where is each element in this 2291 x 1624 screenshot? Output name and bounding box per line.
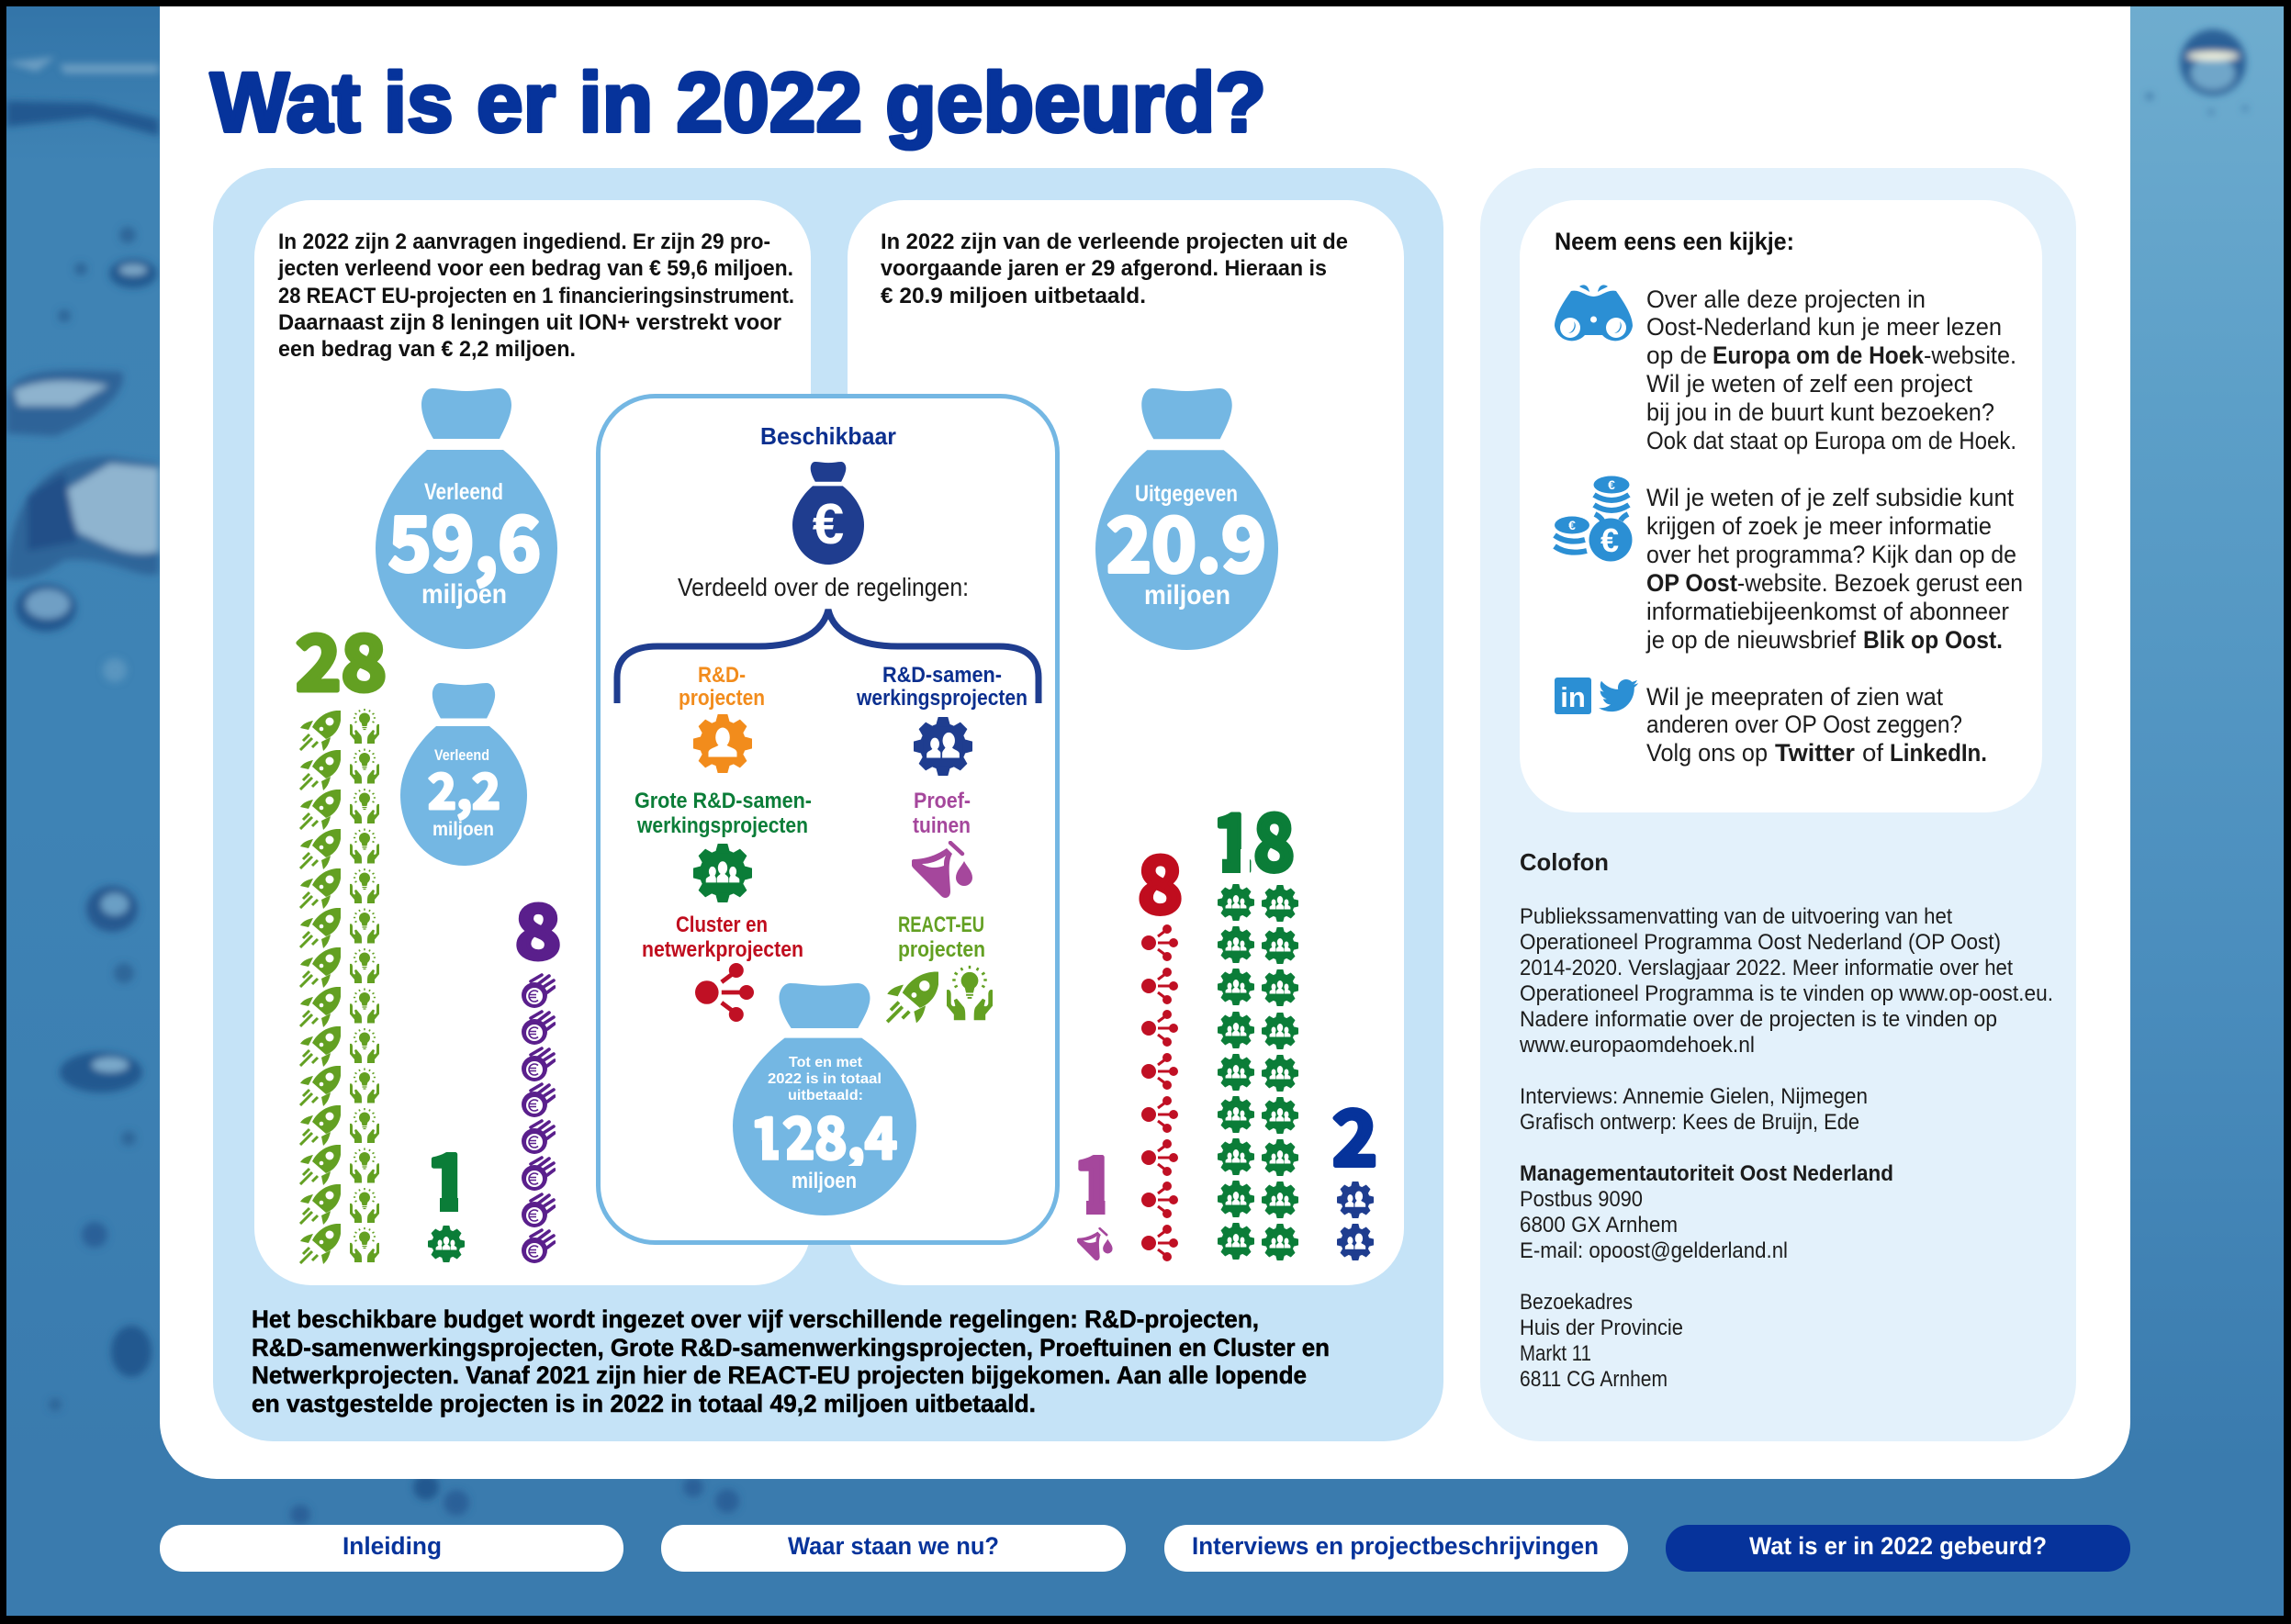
text block: colofon: Grafisch ontwerp: Kees de Bruijn, Ede: [1520, 1110, 1859, 1135]
scheme: R&D-projecten: projecten: [679, 686, 765, 711]
stat: 2 R&D collaboration projects: [1332, 1078, 1377, 1260]
bag: verleend 59,6 miljoen: [376, 388, 557, 649]
text block: social media: Wil je meepraten of zien wat: [1646, 683, 1943, 711]
text block: europa om de hoek: Wil je weten of zelf een project: [1646, 370, 1972, 398]
scheme: REACT-EU projecten: projecten: [898, 937, 985, 962]
scheme: R&D-samenwerkingsprojecten: [856, 663, 1028, 776]
panel: verleend: [254, 200, 811, 1285]
nav button: active page: [1666, 1525, 2130, 1572]
stat: 1 proeftuin: 1: [1073, 1124, 1117, 1234]
icon: coin stacks: €: [1568, 518, 1576, 532]
text block: europa om de hoek: -website.: [1924, 342, 2016, 369]
text block: verleend intro: jecten verleend voor een bedrag van € 59,6 miljoen.: [277, 256, 793, 281]
icons: hands with light bulb: [350, 709, 379, 1262]
stat: 2 R&D collaboration projects: 2: [1332, 1078, 1377, 1188]
heading: beschikbaar: Beschikbaar: [760, 422, 896, 450]
stat: 18 large R&D projects: [1218, 812, 1298, 1260]
stat: 1 proeftuin: [1077, 1155, 1113, 1260]
scheme: R&D-projecten: [679, 663, 765, 773]
text block: colofon: E-mail: opoost@gelderland.nl: [1520, 1238, 1788, 1263]
text block: social media: of: [1862, 739, 1883, 767]
bag: totaal 128,4 miljoen: 2022 is in totaal: [768, 1071, 882, 1087]
text block: uitgegeven intro: voorgaande jaren er 29 afgerond. Hieraan is: [881, 256, 1327, 281]
text block: europa om de hoek: [1646, 286, 2016, 454]
scheme: cluster en netwerkprojecten: netwerkprojecten: [642, 937, 803, 962]
text block: social media: [1646, 683, 1987, 767]
bag: uitgegeven 20.9 miljoen: Uitgegeven: [1135, 481, 1238, 507]
stat: 1 large R&D project: [428, 1152, 465, 1262]
text block: social media: anderen over OP Oost zeggen?: [1646, 711, 1962, 738]
text block: OP Oost website: krijgen of zoek je meer informatie: [1646, 512, 1992, 540]
bag: totaal 128,4 miljoen: 128,4: [750, 1092, 897, 1175]
text block: OP Oost website: OP Oost: [1646, 569, 1737, 597]
text block: colofon: Postbus 9090: [1520, 1187, 1643, 1212]
scheme: R&D-samenwerkingsprojecten: werkingsprojecten: [856, 686, 1028, 711]
scheme: R&D-projecten: R&D-: [698, 663, 746, 688]
text block: OP Oost website: Blik op Oost.: [1863, 626, 2003, 654]
scheme: REACT-EU projecten: REACT-EU: [898, 913, 984, 937]
text block: budget summary: Netwerkprojecten. Vanaf 2021 zijn hier de REACT-EU projecten bijgekomen. Aan alle lopende: [252, 1361, 1307, 1389]
text block: colofon: Operationeel Programma is te vinden op www.op-oost.eu.: [1520, 981, 2053, 1006]
panel: neem eens een kijkje: [1520, 200, 2042, 812]
bag: verleend 59,6 miljoen: 59,6: [388, 484, 541, 593]
text block: budget summary: R&D-samenwerkingsprojecten, Grote R&D-samenwerkingsprojecten, Proeftuinen en Cluster en: [252, 1334, 1330, 1361]
panel: beschikbaar: [599, 397, 1058, 1243]
text block: verleend intro: Daarnaast zijn 8 leningen uit ION+ verstrekt voor: [278, 310, 781, 335]
scheme: grote R&D-samenwerkingsprojecten: Grote R&D-samen-: [635, 789, 812, 813]
text block: uitgegeven intro: € 20.9 miljoen uitbetaald.: [881, 284, 1146, 308]
text block: social media: Volg ons op: [1646, 739, 1768, 767]
scheme: proeftuinen: tuinen: [913, 813, 971, 838]
stat: 28 REACT-EU projects: [296, 602, 387, 1264]
text block: europa om de hoek: Oost-Nederland kun je meer lezen: [1646, 313, 2002, 341]
scheme: R&D-samenwerkingsprojecten: R&D-samen-: [882, 663, 1002, 688]
nav button: interviews: Interviews en projectbeschrijvingen: [1192, 1532, 1599, 1560]
text block: colofon: Managementautoriteit Oost Nederland: [1520, 1161, 1893, 1186]
text block: OP Oost website: [1645, 484, 2023, 654]
scheme: cluster en netwerkprojecten: Cluster en: [676, 913, 768, 937]
text block: europa om de hoek: bij jou in de buurt kunt bezoeken?: [1646, 398, 1994, 426]
icon: linkedin: in: [1560, 681, 1586, 713]
bag: verleend 59,6 miljoen: Verleend: [424, 479, 503, 505]
icon: euro money bag: [792, 462, 864, 565]
stat: 8 loans: 8: [515, 874, 561, 980]
text block: verleend intro: 28 REACT EU-projecten en 1 financieringsinstrument.: [278, 284, 794, 308]
text block: verleend intro: een bedrag van € 2,2 miljoen.: [278, 337, 576, 362]
text block: OP Oost website: Wil je weten of je zelf subsidie kunt: [1646, 484, 2014, 511]
text block: social media: LinkedIn.: [1890, 739, 1987, 767]
text block: europa om de hoek: op de: [1646, 342, 1707, 369]
scheme: grote R&D-samenwerkingsprojecten: [635, 789, 812, 902]
bag: verleend 59,6 miljoen: miljoen: [421, 579, 507, 610]
text block: colofon: Nadere informatie over de projecten is te vinden op: [1520, 1007, 1997, 1032]
scheme: REACT-EU projecten: [887, 913, 993, 1023]
panel: right sidebar: [1480, 168, 2076, 1441]
scheme: proeftuinen: [911, 789, 972, 898]
stat: 8 loans: [515, 874, 561, 1263]
text block: europa om de hoek: Over alle deze projecten in: [1646, 286, 1926, 313]
bag: uitgegeven 20.9 miljoen: miljoen: [1144, 580, 1230, 610]
nav button: waar staan we nu: [661, 1525, 1126, 1572]
icon: twitter: [1599, 679, 1638, 711]
text block: colofon: [1519, 848, 2053, 1392]
scheme: cluster en netwerkprojecten: [642, 913, 803, 1022]
panel: left main panel: [213, 168, 1443, 1441]
text block: verleend intro: [277, 230, 794, 362]
white page card: [160, 0, 2130, 1479]
icon: coin stacks: €: [1600, 521, 1619, 559]
text block: verleend intro: In 2022 zijn 2 aanvragen ingediend. Er zijn 29 pro-: [278, 230, 770, 254]
text block: budget summary: [252, 1305, 1330, 1417]
text block: OP Oost website: je op de nieuwsbrief: [1645, 626, 1856, 654]
bag: verleend 2,2 miljoen: [400, 683, 527, 866]
text block: colofon: 6800 GX Arnhem: [1520, 1213, 1678, 1238]
text block: budget summary: en vastgestelde projecten is in 2022 in totaal 49,2 miljoen uitbetaald.: [252, 1390, 1036, 1417]
text block: colofon: Operationeel Programma Oost Nederland (OP Oost): [1520, 930, 2001, 955]
text block: uitgegeven intro: In 2022 zijn van de verleende projecten uit de: [881, 230, 1348, 254]
text block: social media: Twitter: [1775, 739, 1855, 767]
bag: totaal 128,4 miljoen: Tot en met: [789, 1055, 863, 1070]
text block: colofon: 2014-2020. Verslagjaar 2022. Meer informatie over het: [1520, 956, 2013, 980]
text block: colofon: Huis der Provincie: [1520, 1316, 1683, 1340]
icon: coin stacks: €: [1608, 477, 1615, 492]
brace: [617, 610, 1039, 703]
scheme: proeftuinen: Proef-: [914, 789, 971, 813]
text block: uitgegeven intro: [881, 230, 1348, 308]
text block: europa om de hoek: Europa om de Hoek: [1713, 342, 1925, 369]
stat: 28 REACT-EU projects: 28: [296, 602, 387, 712]
text block: colofon: Publiekssamenvatting van de uitvoering van het: [1520, 904, 1952, 929]
scheme: grote R&D-samenwerkingsprojecten: werkingsprojecten: [636, 813, 808, 838]
text block: OP Oost website: -website. Bezoek gerust een: [1737, 569, 2023, 597]
text block: OP Oost website: informatiebijeenkomst of abonneer: [1646, 598, 2009, 625]
nav button: interviews: [1164, 1525, 1628, 1572]
nav button: inleiding: [160, 1525, 623, 1572]
bag: uitgegeven 20.9 miljoen: [1095, 388, 1278, 650]
icon: euro money bag: €: [813, 493, 844, 556]
title: Wat is er in 2022 gebeurd?: [210, 56, 1266, 150]
bag: verleend 2,2 miljoen: 2,2: [428, 754, 500, 823]
text block: colofon: www.europaomdehoek.nl: [1519, 1033, 1755, 1058]
icon: coin stacks: [1555, 476, 1633, 562]
stat: 8 cluster projects: [1138, 823, 1183, 1261]
icons: rockets: [300, 711, 341, 1264]
bag: totaal 128,4 miljoen: miljoen: [792, 1169, 857, 1193]
stat: 18 large R&D projects: 18: [1212, 780, 1295, 894]
text block: colofon: Markt 11: [1520, 1341, 1591, 1366]
nav button: waar staan we nu: Waar staan we nu?: [788, 1532, 999, 1560]
text block: colofon: Bezoekadres: [1520, 1290, 1633, 1315]
text block: colofon: Colofon: [1520, 848, 1609, 876]
text block: colofon: Interviews: Annemie Gielen, Nijmegen: [1520, 1084, 1868, 1109]
bag: totaal 128,4 miljoen: [733, 983, 916, 1215]
bag: verleend 2,2 miljoen: miljoen: [432, 819, 494, 840]
text block: europa om de hoek: Ook dat staat op Europa om de Hoek.: [1646, 427, 2016, 454]
bag: totaal 128,4 miljoen: uitbetaald:: [788, 1088, 863, 1103]
nav button: inleiding: Inleiding: [343, 1532, 442, 1560]
bag: verleend 2,2 miljoen: Verleend: [434, 746, 489, 764]
stat: 1 large R&D project: 1: [426, 1122, 470, 1232]
stat: 8 cluster projects: 8: [1138, 823, 1183, 936]
text: verdeeld: Verdeeld over de regelingen:: [678, 573, 969, 601]
text block: OP Oost website: over het programma? Kijk dan op de: [1646, 541, 2016, 568]
icon: linkedin: [1555, 678, 1591, 714]
text block: budget summary: Het beschikbare budget wordt ingezet over vijf verschillende regelingen: R&D-projecten,: [252, 1305, 1259, 1333]
bag: uitgegeven 20.9 miljoen: 20.9: [1106, 485, 1266, 594]
icon: binoculars: [1555, 285, 1633, 341]
text block: colofon: 6811 CG Arnhem: [1520, 1367, 1668, 1392]
panel: uitgegeven: [848, 200, 1404, 1285]
nav button: active page: Wat is er in 2022 gebeurd?: [1749, 1532, 2047, 1560]
heading: neem eens een kijkje: Neem eens een kijkje:: [1555, 228, 1794, 255]
